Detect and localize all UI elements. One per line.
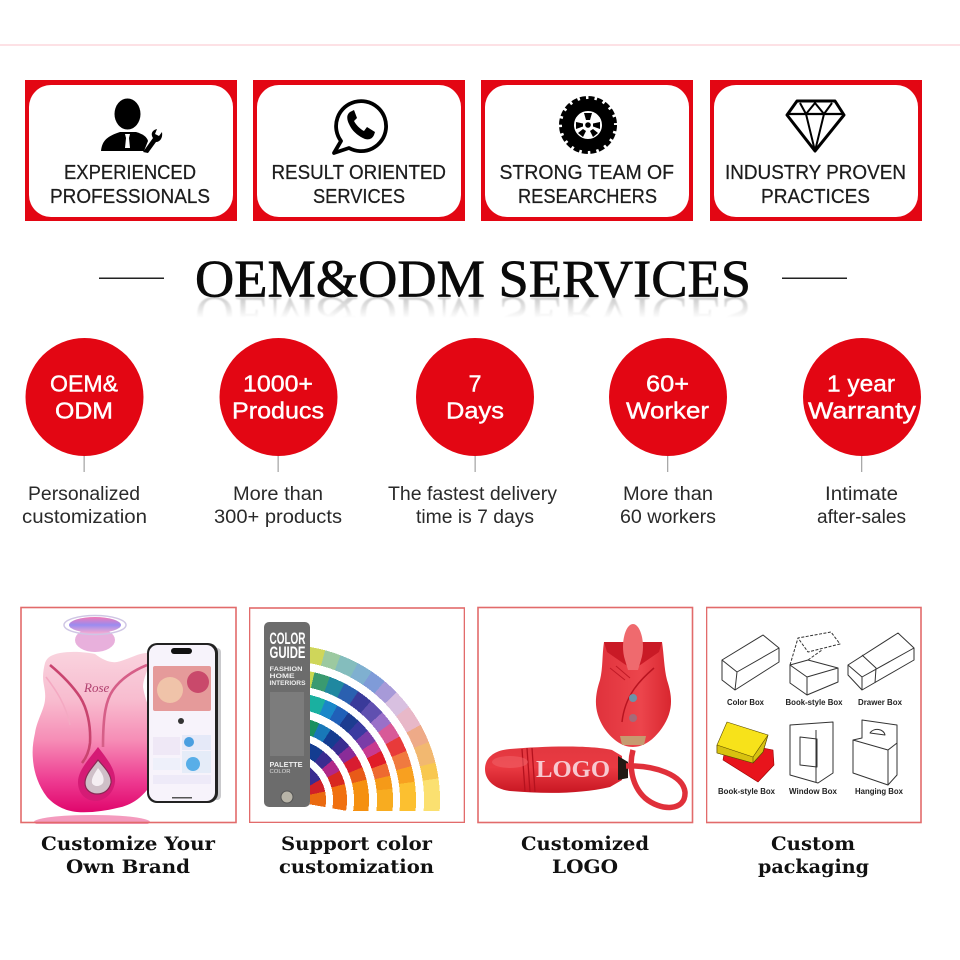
card: experienced professionals	[25, 80, 237, 221]
stat: 1 year warranty: Warranty	[808, 398, 917, 424]
stat: 1000+ products: 1000+	[243, 370, 313, 396]
box labels: Book-style Box	[786, 697, 843, 707]
caption: custom packaging	[758, 833, 869, 878]
caption: customize your own brand	[41, 833, 216, 878]
label: EXPERIENCED	[64, 162, 196, 184]
caption: customize your own brand: Own Brand	[66, 856, 190, 878]
label: RESEARCHERS	[518, 186, 657, 208]
caption: customized logo: Customized	[521, 833, 649, 855]
box labels	[718, 697, 903, 796]
heading: OEM&ODM SERVICES	[99, 255, 847, 325]
stat: OEM & ODM: Personalized	[28, 484, 140, 505]
stat: 60+ workers: 60 workers	[620, 507, 716, 528]
stat: 1 year warranty: 1 year	[827, 370, 895, 396]
product: pink rose: Rose	[83, 680, 110, 695]
stat: 7 days: The fastest delivery	[388, 484, 558, 505]
label	[500, 162, 674, 208]
stat: OEM & ODM: customization	[22, 507, 147, 528]
color guide booklet: COLOR	[270, 769, 291, 775]
stat: 1000+ products: 300+ products	[214, 507, 342, 528]
stat: OEM & ODM: OEM&	[50, 370, 118, 396]
caption: support color customization: Support color	[281, 833, 433, 855]
color guide booklet	[264, 622, 310, 807]
card: strong team of researchers	[481, 80, 693, 221]
stat: 1000+ products	[214, 338, 342, 528]
icon: diamond	[787, 101, 844, 151]
stat: 60+ workers: Worker	[626, 398, 709, 424]
color guide booklet: PALETTE	[270, 762, 303, 769]
stat: OEM & ODM	[22, 338, 147, 528]
box labels: Window Box	[789, 786, 837, 796]
product: cord	[626, 750, 685, 807]
stat: 7 days: time is 7 days	[416, 507, 534, 528]
product: red rose	[596, 624, 671, 747]
label: PROFESSIONALS	[50, 186, 210, 208]
panel: support color customization	[249, 607, 465, 823]
stat: 1000+ products: Producs	[232, 398, 324, 424]
label: STRONG TEAM OF	[500, 162, 674, 184]
stat: 60+ workers: 60+	[646, 370, 689, 396]
icon: professional with wrench	[101, 98, 162, 153]
card: result oriented services	[253, 80, 465, 221]
box drawings	[722, 632, 914, 785]
icon: wheel	[561, 98, 615, 152]
stat: OEM & ODM: ODM	[55, 398, 113, 424]
caption: customized logo	[521, 833, 649, 878]
stat: 7 days: 7	[468, 370, 482, 396]
box labels: Color Box	[727, 697, 764, 707]
color guide booklet: INTERIORS	[270, 680, 306, 687]
caption: customized logo: LOGO	[552, 856, 618, 878]
product: pink rose	[33, 616, 160, 829]
panel: customize your own brand	[20, 606, 237, 824]
box labels: Drawer Box	[858, 697, 902, 707]
stat: 7 days: Days	[446, 398, 504, 424]
stat: 1 year warranty: after-sales	[817, 507, 906, 528]
label: INDUSTRY PROVEN	[725, 162, 906, 184]
caption: support color customization	[279, 833, 434, 878]
caption: customize your own brand: Customize Your	[41, 833, 216, 855]
product: red bullet with LOGO: LOGO	[536, 757, 610, 783]
stat: 7 days	[388, 338, 558, 528]
label	[50, 162, 210, 208]
label: RESULT ORIENTED	[272, 162, 446, 184]
color guide booklet: COLOR	[270, 629, 306, 648]
stat: 60+ workers	[609, 338, 727, 528]
label	[272, 162, 446, 208]
label: PRACTICES	[761, 186, 870, 208]
color guide booklet: HOME	[270, 673, 295, 680]
panel: custom packaging	[706, 606, 922, 824]
product: red bullet with LOGO	[485, 746, 628, 793]
label: SERVICES	[313, 186, 405, 208]
red and yellow box	[717, 722, 774, 782]
icon: chat phone	[334, 101, 386, 153]
caption: custom packaging: Custom	[771, 833, 855, 855]
box labels: Hanging Box	[855, 786, 903, 796]
panel: customized logo	[477, 606, 694, 824]
top divider line	[0, 44, 960, 46]
stat: 60+ workers: More than	[623, 484, 713, 505]
color guide booklet: GUIDE	[270, 643, 306, 662]
stat: 1 year warranty: Intimate	[825, 484, 898, 505]
color guide booklet: FASHION	[270, 666, 303, 673]
label	[725, 162, 906, 208]
product: phone app	[147, 643, 221, 803]
caption: custom packaging: packaging	[758, 856, 869, 878]
card: industry proven practices	[710, 80, 922, 221]
caption: support color customization: customization	[279, 856, 434, 878]
box labels: Book-style Box	[718, 786, 775, 796]
stat: 1000+ products: More than	[233, 484, 323, 505]
stat: 1 year warranty	[803, 338, 921, 528]
